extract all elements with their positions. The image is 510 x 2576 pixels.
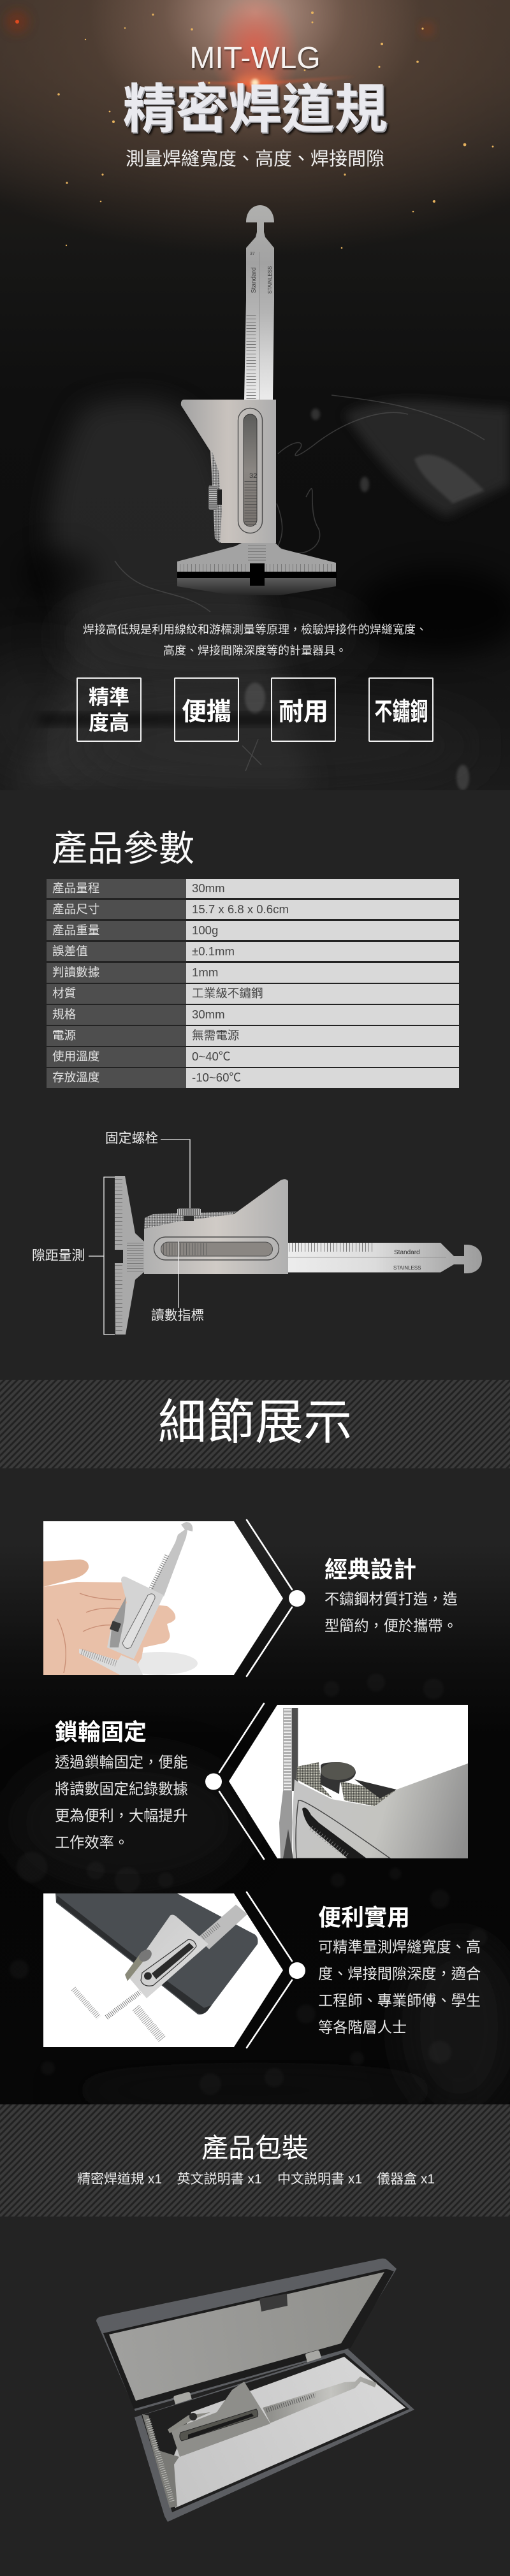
- specification table: 0~40℃: [192, 1050, 230, 1063]
- smoke and worker silhouette: [19, 398, 312, 790]
- specification table: 1mm: [192, 966, 218, 979]
- detail 2 heading: 鎖輪固定: [55, 1719, 147, 1745]
- main title: 精密焊道規: [122, 80, 388, 139]
- detail 1 text: 型簡約，便於攜帶。: [324, 1617, 458, 1634]
- gauge body: [171, 2382, 270, 2457]
- feature box: stainless steel: 不鏽鋼: [374, 698, 428, 725]
- stem below: [279, 1791, 292, 1858]
- details title: 細節展示: [158, 1396, 352, 1450]
- detail 3 text: [318, 1939, 481, 2036]
- base: [177, 543, 336, 572]
- body: [127, 1914, 208, 1998]
- specification table: 30mm: [192, 1008, 225, 1021]
- specification table: -10~60℃: [192, 1071, 241, 1084]
- specification table: 誤差值: [52, 944, 88, 958]
- hero background glow: [0, 0, 510, 790]
- specification heading: 產品參數: [52, 829, 194, 869]
- chevron and node for detail 1: [246, 1519, 305, 1677]
- rough surface: [296, 1762, 333, 1798]
- detail 1 text: 不鏽鋼材質打造，造: [324, 1591, 458, 1607]
- feature box: precision: 度高: [89, 711, 129, 734]
- intro paragraph: 焊接高低規是利用線紋和游標測量等原理，檢驗焊接件的焊縫寬度、: [83, 623, 427, 636]
- detail image 2: locking wheel close-up: [229, 1705, 468, 1858]
- package items: 英文説明書 x1: [177, 2172, 262, 2187]
- slot: [296, 1800, 390, 1858]
- knob: [208, 486, 217, 510]
- feature box: precision: [76, 677, 142, 742]
- chevron and node for detail 3: [246, 1892, 305, 2048]
- package items: 中文説明書 x1: [277, 2172, 362, 2187]
- feature box: durable: [271, 677, 336, 742]
- specification table: 材質: [52, 987, 76, 1000]
- callout lines: [89, 1140, 190, 1335]
- package title: 產品包裝: [201, 2133, 309, 2163]
- specification table: 產品重量: [52, 923, 99, 937]
- product model heading: MIT-WLG: [189, 41, 321, 75]
- chevron and node for detail 2: [205, 1703, 265, 1860]
- gauge base: [79, 1649, 143, 1675]
- knob: [321, 1762, 356, 1794]
- hero product: vertical weld gauge: 32: [249, 472, 257, 480]
- specification table: 無需電源: [192, 1029, 239, 1042]
- detail 1 heading: 經典設計: [324, 1556, 416, 1582]
- rough top: [144, 1212, 237, 1229]
- body: [292, 1763, 468, 1858]
- specification table: 規格: [52, 1008, 76, 1021]
- specification table: 存放溫度: [52, 1071, 99, 1084]
- label: reading indicator: 讀數指標: [151, 1308, 204, 1323]
- blade: [287, 1243, 482, 1273]
- detail 1 text: [324, 1591, 458, 1634]
- ruler: [283, 1708, 298, 1791]
- detail 2 text: 更為便利，大幅提升: [55, 1807, 188, 1824]
- intro paragraph: [83, 623, 427, 657]
- detail 3 text: 可精準量測焊縫寬度、高: [318, 1939, 481, 1955]
- label: fixing screw: 固定螺栓: [105, 1131, 158, 1146]
- lid: [96, 2259, 397, 2411]
- foam: [172, 2357, 405, 2508]
- body: [144, 1179, 288, 1274]
- specification table: 使用溫度: [52, 1050, 99, 1063]
- gauge blade: [150, 1522, 193, 1596]
- horizontal gauge diagram with callout lines: STAINLESS: [393, 1265, 421, 1271]
- horizontal gauge diagram with callout lines: [89, 1139, 482, 1335]
- feature box: durable: 耐用: [279, 698, 328, 725]
- banner: details heading: [0, 1380, 510, 1468]
- specification table: 產品量程: [52, 881, 99, 895]
- detail image 3: gauge on instrument case: [43, 1893, 283, 2047]
- gauge blade: [263, 2377, 377, 2423]
- horizontal gauge diagram with callout lines: Standard: [394, 1249, 420, 1256]
- specification table: 15.7 x 6.8 x 0.6cm: [192, 902, 289, 916]
- hero product: vertical weld gauge: STAINLESS: [267, 266, 273, 294]
- ruler ticks on white: [73, 1988, 99, 2017]
- knob: [177, 1208, 201, 1216]
- detail 3 text: 等各階層人士: [318, 2019, 407, 2036]
- detail 3 heading: 便利實用: [318, 1904, 410, 1930]
- hand: [43, 1559, 89, 1587]
- detail 2 text: 透過鎖輪固定，便能: [55, 1754, 188, 1770]
- feature box: stainless steel: [368, 677, 433, 742]
- specification table: ±0.1mm: [192, 944, 235, 958]
- gauge T base: [142, 2414, 179, 2508]
- detail 2 text: 工作效率。: [55, 1834, 129, 1851]
- intro paragraph: 高度、焊接間隙深度等的計量器具。: [163, 644, 347, 657]
- body: [181, 400, 276, 543]
- feature box: portable: [174, 677, 239, 742]
- subtitle: 測量焊縫寬度、高度、焊接間隙: [126, 149, 384, 170]
- case: [55, 1893, 258, 2014]
- product package photo: open case with gauge: [96, 2259, 414, 2522]
- specification table: [47, 879, 459, 1088]
- package items: 精密焊道規 x1: [77, 2172, 162, 2187]
- detail 3 text: 工程師、專業師傅、學生: [318, 1992, 481, 2009]
- specification table: 產品尺寸: [52, 902, 99, 916]
- label: gap measurement: 隙距量測: [32, 1248, 85, 1263]
- gauge body: [107, 1577, 164, 1659]
- banner: package contents: [0, 2104, 510, 2217]
- hero product: vertical weld gauge: Standard: [251, 267, 258, 293]
- details section background: [0, 1591, 510, 2104]
- blade: [244, 205, 274, 400]
- hero product: vertical weld gauge: [177, 205, 337, 595]
- specification table: 100g: [192, 923, 218, 937]
- package items: 儀器盒 x1: [377, 2172, 435, 2187]
- specification table: 電源: [52, 1029, 76, 1042]
- specification table: 工業級不鏽鋼: [192, 987, 263, 1000]
- T base: [115, 1176, 144, 1335]
- detail image 1: gauge held in hand: [43, 1521, 283, 1675]
- sparks: [57, 11, 493, 249]
- package items: [77, 2172, 435, 2187]
- specification table: 判讀數據: [52, 966, 99, 979]
- hinges: [173, 2392, 193, 2410]
- detail 2 text: 將讀數固定紀錄數據: [55, 1781, 188, 1797]
- specification table: 30mm: [192, 881, 225, 895]
- hero product: vertical weld gauge: 37: [250, 252, 255, 256]
- detail 3 text: 度、焊接間隙深度，適合: [318, 1965, 481, 1982]
- feature box: precision: 精準: [89, 686, 129, 709]
- feature box: portable: 便攜: [182, 698, 231, 725]
- hero smoke, welder silhouette and sparks: [4, 8, 510, 790]
- detail 2 text: [55, 1754, 188, 1851]
- base shell: [135, 2349, 414, 2522]
- blade: [198, 1904, 247, 1949]
